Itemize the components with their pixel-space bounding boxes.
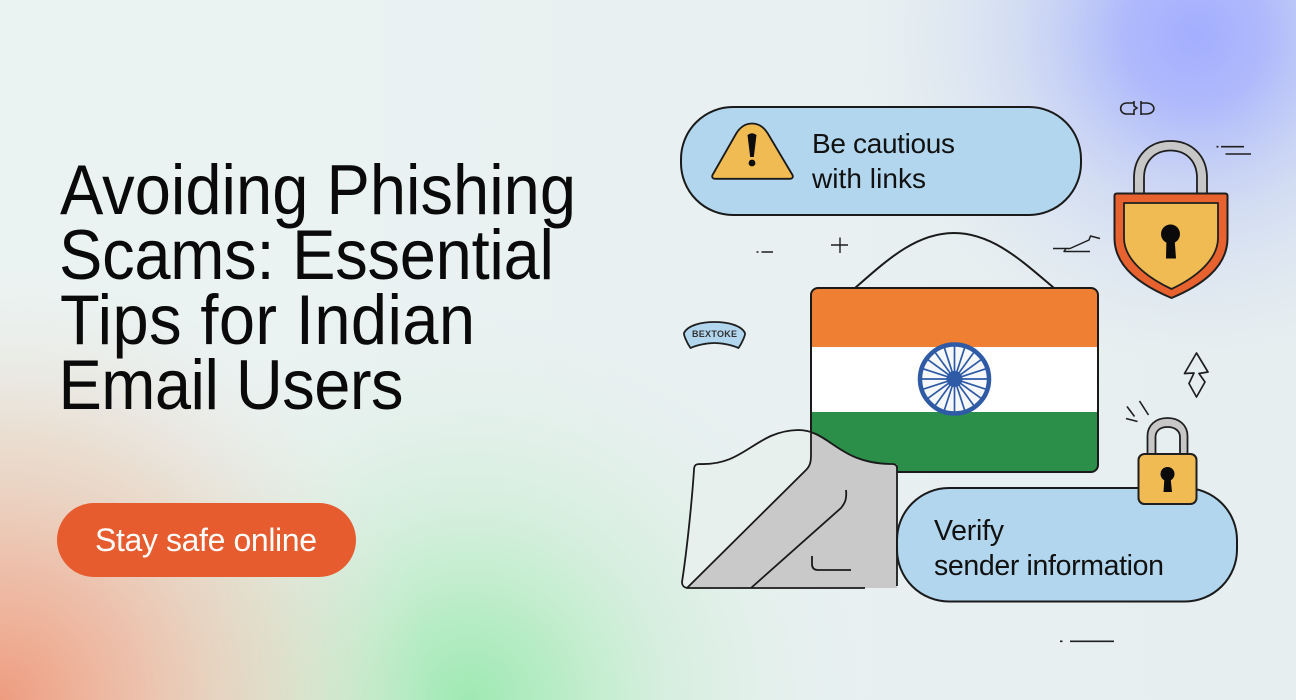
callout text: Verify <box>934 515 1005 547</box>
decorative dash bottom <box>1060 640 1114 642</box>
icon: small padlock <box>1138 418 1196 504</box>
icon: large padlock shield <box>1114 141 1228 298</box>
decorative plus <box>831 238 848 253</box>
decorative dash left <box>756 251 773 253</box>
callout text: Be cautious <box>812 128 955 159</box>
title: Scams: Essential <box>59 217 554 295</box>
title: Avoiding Phishing <box>60 152 576 230</box>
icon: outlined double arrow <box>1184 353 1208 397</box>
title <box>58 152 576 425</box>
callout: verify sender information <box>897 488 1237 602</box>
icon: broken link <box>1121 101 1154 115</box>
icon: warning triangle <box>712 124 793 179</box>
callout: be cautious with links <box>681 107 1081 215</box>
title: Email Users <box>58 347 404 425</box>
button: stay safe online <box>57 503 356 577</box>
button: stay safe online: Stay safe online <box>95 522 317 558</box>
arc handle above flag <box>855 233 1054 288</box>
icon: small badge: BEXTOKE <box>692 329 737 339</box>
decorative rays <box>1126 401 1148 422</box>
document folded sheet <box>682 430 897 588</box>
title: Tips for Indian <box>60 282 475 360</box>
decorative spark <box>1053 236 1100 252</box>
flag of India <box>811 288 1098 472</box>
callout text <box>811 128 955 194</box>
callout text: sender information <box>934 550 1164 582</box>
decorative motion lines <box>1216 147 1251 154</box>
ashoka chakra <box>920 344 989 414</box>
icon: small badge <box>684 322 745 348</box>
callout text <box>934 515 1164 582</box>
callout text: with links <box>811 163 926 194</box>
